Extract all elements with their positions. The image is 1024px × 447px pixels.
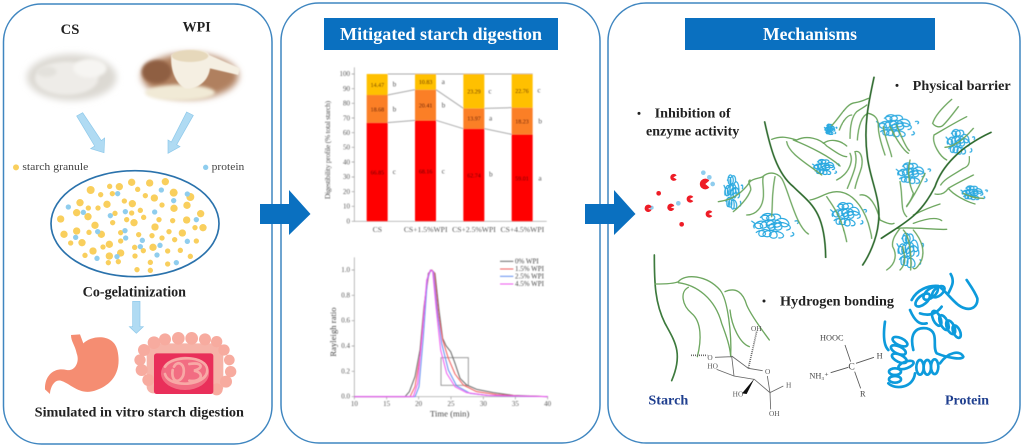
stacked bar chart: digestibility profile: c <box>393 167 397 176</box>
illustration: starch network with embedded protein <box>718 77 991 270</box>
line chart: Rayleigh ratio: 1.5% WPI <box>515 265 545 273</box>
image: corn starch powder <box>27 54 117 101</box>
stacked bar chart: digestibility profile: c <box>442 167 446 176</box>
stacked bar chart: digestibility profile: CS+2.5%WPI <box>452 225 496 234</box>
diagram: glucose ring: O <box>765 367 770 376</box>
stacked bar chart: digestibility profile: b <box>393 104 397 113</box>
text: Physical barrier: Physical barrier <box>913 79 1011 94</box>
stacked bar chart: digestibility profile: CS+4.5%WPI <box>500 225 545 234</box>
line chart: Rayleigh ratio: 40 <box>544 400 552 408</box>
diagram: glucose ring: H <box>786 380 792 389</box>
line chart: Rayleigh ratio: 4.5% WPI <box>515 280 545 288</box>
stacked bar chart: digestibility profile: a <box>489 114 493 123</box>
stacked bar chart: digestibility profile: c <box>537 86 541 95</box>
stacked bar chart: digestibility profile: b <box>538 116 542 125</box>
stacked bar chart: digestibility profile: 20 <box>343 188 351 196</box>
stacked bar chart: digestibility profile: CS+1.5%WPI <box>404 225 448 234</box>
illustration: enzymes and inhibitors <box>645 170 715 227</box>
stacked bar chart: digestibility profile: 0 <box>346 217 350 225</box>
diagram: amino acid <box>809 334 883 399</box>
diagram: amino acid: R <box>860 390 866 399</box>
label: Co-gelatinization: Co-gelatinization <box>83 285 186 301</box>
stacked bar chart: digestibility profile: 100 <box>340 70 350 78</box>
title bar: Mitigated starch digestion: Mitigated starch digestion <box>340 24 542 44</box>
label: Starch: Starch <box>648 392 689 407</box>
arrow: CS to mixture <box>77 113 105 153</box>
stacked bar chart: digestibility profile: 40 <box>343 158 351 166</box>
diagram: starch and protein mixture <box>51 171 219 277</box>
text: Inhibition of enzyme activity <box>637 106 739 139</box>
stacked bar chart: digestibility profile: 50 <box>343 144 351 152</box>
line chart: Rayleigh ratio: 15 <box>383 400 391 408</box>
line chart: Rayleigh ratio: 2.5% WPI <box>515 272 545 280</box>
diagram: glucose ring: HO <box>733 390 743 399</box>
diagram: amino acid: H <box>877 352 883 361</box>
label: Protein: Protein <box>945 392 990 407</box>
illustration: starch chain <box>654 255 769 381</box>
stacked bar chart: digestibility profile <box>323 67 547 234</box>
diagram: glucose ring <box>691 324 792 418</box>
line chart: Rayleigh ratio <box>328 257 552 419</box>
title bar: Mechanisms: Mechanisms <box>763 24 857 44</box>
stacked bar chart: digestibility profile: 10 <box>343 203 351 211</box>
stacked bar chart: digestibility profile: 13.97 <box>467 117 481 123</box>
heading: CS: CS <box>61 22 79 38</box>
legend: starch granule: starch granule <box>22 161 88 173</box>
icon: stomach <box>45 334 119 394</box>
caption: Simulated in vitro starch digestion: Simulated in vitro starch digestion <box>35 406 244 421</box>
diagram: glucose ring: HO <box>707 362 718 371</box>
stacked bar chart: digestibility profile: 18.68 <box>371 107 384 113</box>
diagram: glucose ring: OH <box>751 324 762 333</box>
line chart: Rayleigh ratio: 35 <box>512 400 519 408</box>
stacked bar chart: digestibility profile: 60 <box>343 129 351 137</box>
stacked bar chart: digestibility profile: 68.16 <box>419 169 432 175</box>
stacked bar chart: digestibility profile: 18.23 <box>515 119 529 125</box>
line chart: Rayleigh ratio: 1.0 <box>341 266 351 274</box>
stacked bar chart: digestibility profile: 70 <box>343 114 351 122</box>
stacked bar chart: digestibility profile: 23.29 <box>467 90 481 96</box>
stacked bar chart: digestibility profile: b <box>489 170 493 179</box>
text: Hydrogen bonding: Hydrogen bonding <box>780 295 894 310</box>
line chart: Rayleigh ratio: 0% WPI <box>515 257 539 265</box>
line chart: Rayleigh ratio: 0.4 <box>341 342 351 350</box>
line chart: Rayleigh ratio: 0.6 <box>341 317 351 325</box>
line chart: Rayleigh ratio: Time (min) <box>430 409 469 419</box>
stacked bar chart: digestibility profile: 90 <box>343 85 351 93</box>
panel: mitigated starch digestion <box>281 3 600 443</box>
diagram: amino acid: HOOC <box>820 334 844 343</box>
line chart: Rayleigh ratio: 10 <box>351 400 358 408</box>
line chart: Rayleigh ratio: 0.0 <box>341 393 351 401</box>
arrow: panel 2 to panel 3 <box>585 190 636 235</box>
stacked bar chart: digestibility profile: b <box>393 80 397 89</box>
line chart: Rayleigh ratio: 0.8 <box>341 291 351 299</box>
title bar: Mitigated starch digestion <box>324 18 558 50</box>
line chart: Rayleigh ratio: 25 <box>448 400 455 408</box>
line chart: Rayleigh ratio: Rayleigh ratio <box>328 307 338 357</box>
stacked bar chart: digestibility profile: 10.83 <box>419 80 432 86</box>
diagram: glucose ring: OH <box>769 409 780 418</box>
line chart: Rayleigh ratio: 30 <box>480 400 487 408</box>
stacked bar chart: digestibility profile: c <box>488 86 492 95</box>
stacked bar chart: digestibility profile: 80 <box>343 100 351 108</box>
title bar: Mechanisms <box>685 18 935 50</box>
arrow: panel 1 to panel 2 <box>260 190 310 235</box>
line chart: Rayleigh ratio: 20 <box>415 400 423 408</box>
stacked bar chart: digestibility profile: 66.85 <box>371 170 384 176</box>
diagram: amino acid: C <box>848 361 855 372</box>
stacked bar chart: digestibility profile: a <box>538 174 542 183</box>
diagram: amino acid: NH₃⁺ <box>809 372 829 381</box>
stacked bar chart: digestibility profile: 14.47 <box>371 83 384 89</box>
stacked bar chart: digestibility profile: b <box>442 100 446 109</box>
image: whey protein scoop <box>142 49 240 101</box>
panel: preparation <box>4 4 272 444</box>
text: Inhibition of enzyme activity: Inhibition of <box>655 106 731 121</box>
stacked bar chart: digestibility profile: 22.76 <box>515 89 529 95</box>
stacked bar chart: digestibility profile: 62.74 <box>467 174 481 180</box>
stacked bar chart: digestibility profile: a <box>442 77 446 86</box>
icon: intestine <box>134 332 236 395</box>
stacked bar chart: digestibility profile: 20.41 <box>419 103 432 109</box>
stacked bar chart: digestibility profile: 30 <box>343 173 351 181</box>
diagram: glucose ring: O <box>707 353 713 362</box>
legend: protein: protein <box>212 161 245 173</box>
text: Inhibition of enzyme activity: enzyme activity <box>646 124 739 139</box>
line chart: Rayleigh ratio: 0.2 <box>341 367 351 375</box>
panel: mechanisms <box>608 3 1020 443</box>
illustration: protein ribbon <box>884 274 977 387</box>
stacked bar chart: digestibility profile: 59.01 <box>515 177 529 183</box>
arrow: WPI to mixture <box>168 112 193 153</box>
stacked bar chart: digestibility profile: Digestibility profile (% total starch) <box>323 100 332 199</box>
arrow: to digestion <box>129 301 143 333</box>
heading: WPI: WPI <box>183 20 211 36</box>
stacked bar chart: digestibility profile: CS <box>373 225 382 234</box>
